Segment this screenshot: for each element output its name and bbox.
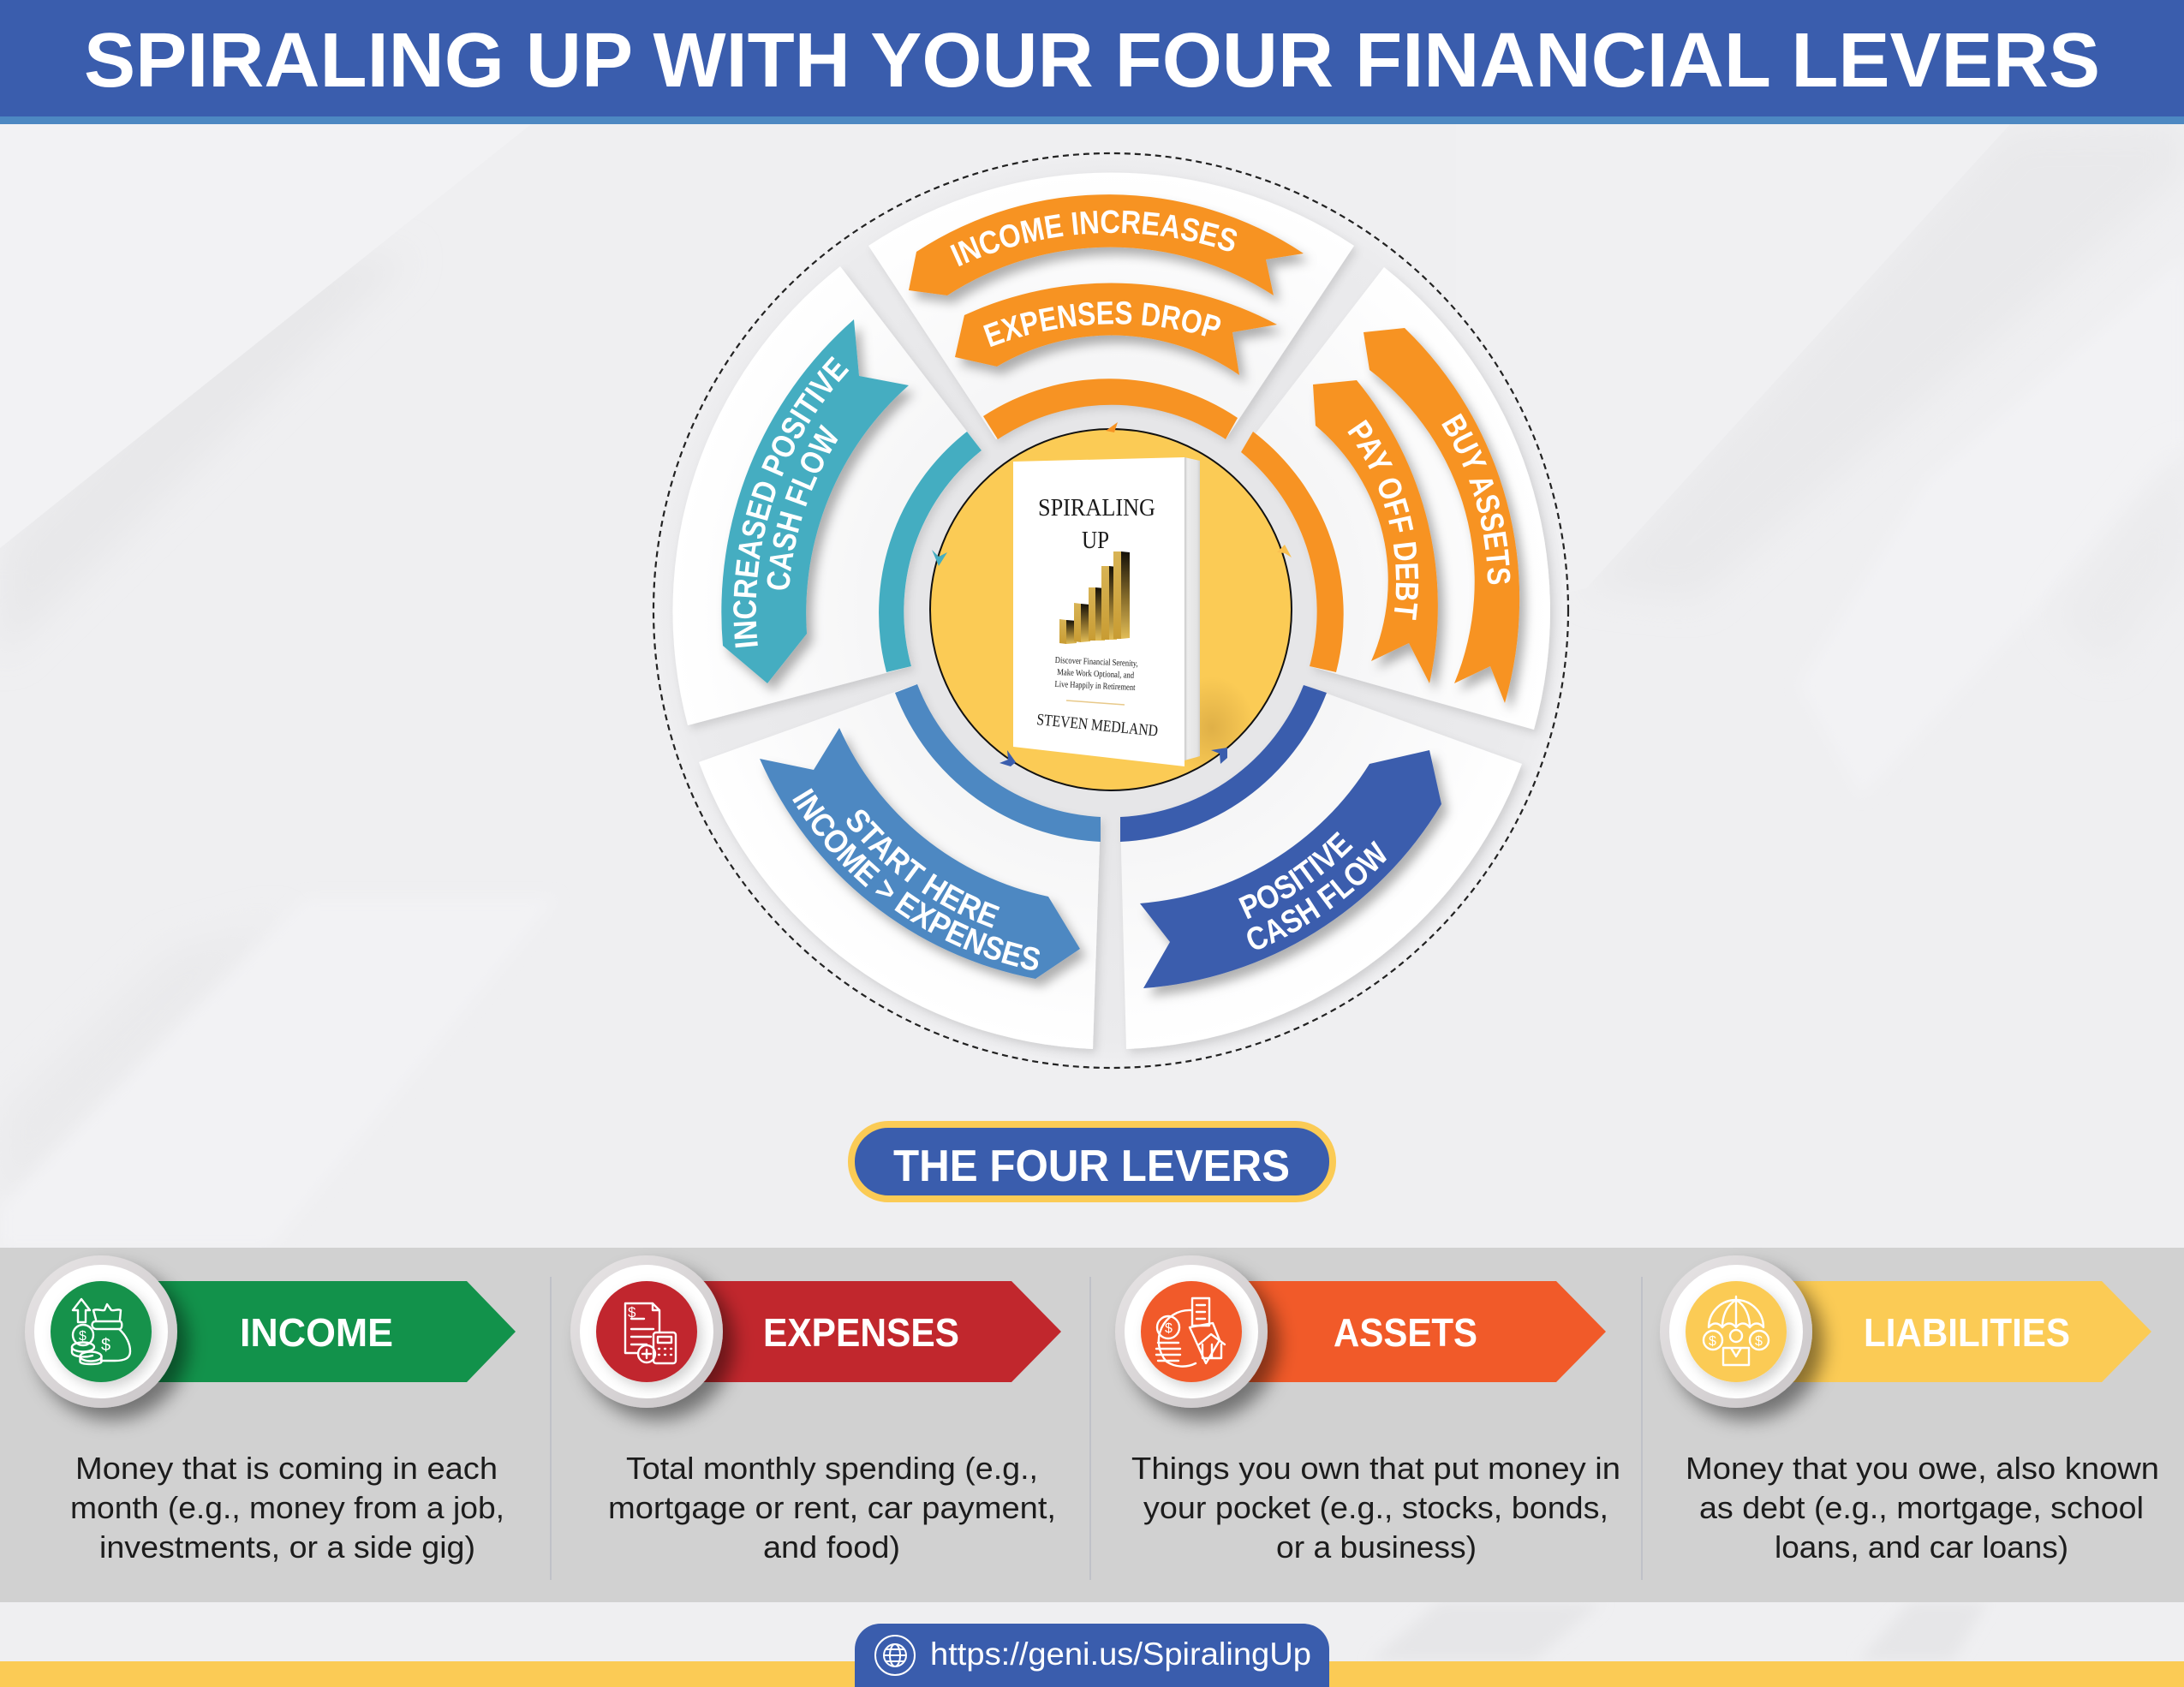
- ribbon: positive cash flow: CASH FLOW: [1247, 840, 1387, 949]
- ribbon: pay off debt: PAY OFF DEBT: [1347, 420, 1418, 620]
- icon: bill and calculator: $: [628, 1304, 636, 1320]
- ribbon: increased positive cash flow: INCREASED POSITIVE: [733, 356, 850, 647]
- panel: right: [1241, 267, 1550, 730]
- description: assets: [1131, 1451, 1620, 1565]
- centre gold circle: [930, 429, 1292, 790]
- url pill: https://geni.us/SpiralingUp: [930, 1636, 1311, 1672]
- icon: umbrella and person: [1704, 1297, 1769, 1365]
- description: income: [70, 1451, 504, 1565]
- description: liabilities: loans, and car loans): [1775, 1529, 2068, 1565]
- lever: liabilities: [1660, 1255, 2159, 1565]
- description: income: investments, or a side gig): [99, 1529, 475, 1565]
- description: expenses: mortgage or rent, car payment,: [608, 1490, 1056, 1525]
- description: assets: or a business): [1276, 1529, 1477, 1565]
- lever: income: INCOME: [240, 1310, 393, 1355]
- description: liabilities: [1686, 1451, 2159, 1565]
- ring band: light blue: [895, 684, 1101, 842]
- ribbon: pay off debt: [1313, 380, 1450, 690]
- url pill: [855, 1624, 1329, 1687]
- book subtitle: [1053, 656, 1138, 693]
- ring band: right orange: [1241, 432, 1344, 672]
- description: income: month (e.g., money from a job,: [70, 1490, 504, 1525]
- panel: left: [672, 266, 982, 725]
- book cover: [1013, 457, 1200, 766]
- icon: money bags: [72, 1299, 130, 1364]
- lever: assets: ASSETS: [1334, 1310, 1477, 1355]
- book author: STEVEN MEDLAND: [1036, 711, 1159, 741]
- icon: umbrella and person: $: [1709, 1334, 1716, 1349]
- footer gold band: [0, 1661, 2184, 1687]
- description: liabilities: Money that you owe, also known: [1686, 1451, 2159, 1486]
- ribbon: buy assets: [1364, 328, 1531, 711]
- icon: money bags: $: [79, 1329, 87, 1344]
- lever: expenses: [570, 1255, 1061, 1565]
- arrowhead: gold right: [1277, 545, 1292, 557]
- description: expenses: Total monthly spending (e.g.,: [626, 1451, 1038, 1486]
- ribbon: expenses drop: EXPENSES DROP: [983, 301, 1221, 348]
- ring band: teal: [879, 432, 982, 672]
- title banner: [0, 0, 2184, 124]
- ribbon: start here: INCOME > EXPENSES: [792, 788, 1040, 970]
- panel: bottom right: [1120, 685, 1522, 1049]
- book cover: UP: [1082, 527, 1109, 554]
- arrowhead: teal: [932, 550, 947, 566]
- ribbon: positive cash flow: [1140, 750, 1453, 1001]
- ribbon: start here: [760, 728, 1089, 992]
- spiral diagram: [653, 152, 1569, 1069]
- description: assets: Things you own that put money in: [1131, 1451, 1620, 1486]
- lever: assets: [1115, 1255, 1620, 1565]
- ring band: dark blue: [1120, 685, 1327, 842]
- ring band: top orange: [983, 379, 1238, 439]
- ribbon: buy assets: BUY ASSETS: [1441, 413, 1511, 584]
- arrowhead: light blue: [1000, 750, 1016, 766]
- lever: liabilities: LIABILITIES: [1864, 1310, 2070, 1355]
- lever: income: [25, 1255, 516, 1565]
- panel: top: [868, 173, 1354, 439]
- description: assets: your pocket (e.g., stocks, bonds,: [1143, 1490, 1608, 1525]
- icon: investments: $: [1165, 1321, 1173, 1336]
- book title: SPIRALING: [1038, 494, 1155, 522]
- description: expenses: and food): [763, 1529, 900, 1565]
- dashed outer circle: [653, 153, 1568, 1068]
- icon: investments: [1156, 1298, 1225, 1367]
- title: SPIRALING UP WITH YOUR FOUR FINANCIAL LEVERS: [84, 18, 2100, 104]
- icon: umbrella and person: $: [1755, 1334, 1763, 1349]
- ribbon: expenses drop: [955, 283, 1283, 384]
- heading pill: the four levers: THE FOUR LEVERS: [893, 1142, 1290, 1191]
- icon: money bags: $: [101, 1336, 110, 1355]
- grey disc behind panels: [659, 158, 1563, 1062]
- ribbon: positive cash flow: POSITIVE: [1238, 831, 1353, 920]
- heading pill: the four levers: [851, 1124, 1333, 1199]
- ribbon: start here: START HERE: [846, 810, 1000, 928]
- book subtitle: Make Work Optional, and: [1057, 668, 1135, 681]
- description: income: Money that is coming in each: [75, 1451, 498, 1486]
- book subtitle: Discover Financial Serenity,: [1055, 656, 1138, 669]
- ribbon: income increases: INCOME INCREASES: [950, 210, 1237, 267]
- icon: globe: [875, 1636, 915, 1675]
- icon: bill and calculator: [625, 1303, 676, 1363]
- lever: expenses: EXPENSES: [763, 1310, 959, 1355]
- ribbon: increased positive cash flow: CASH FLOW: [767, 424, 838, 589]
- ribbon: increased positive cash flow: [721, 319, 916, 694]
- book gold bars chart: [1059, 551, 1130, 644]
- description: expenses: [608, 1451, 1056, 1565]
- panel: bottom left: [699, 684, 1101, 1049]
- panel: four levers strip: [0, 1248, 2184, 1602]
- ribbon: income increases: [909, 194, 1310, 308]
- description: liabilities: as debt (e.g., mortgage, school: [1699, 1490, 2144, 1525]
- book subtitle: Live Happily in Retirement: [1054, 680, 1136, 693]
- arrowhead: orange top: [1106, 422, 1118, 432]
- arrowhead: dark blue: [1211, 748, 1227, 764]
